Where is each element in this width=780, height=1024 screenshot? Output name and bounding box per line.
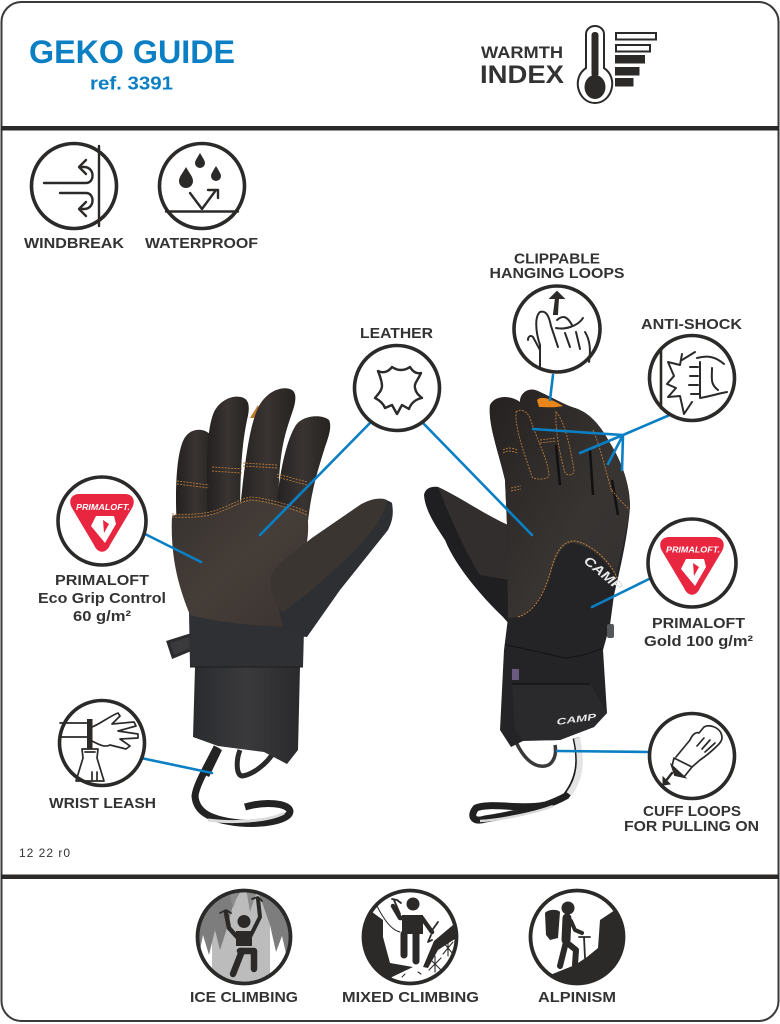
title: GEKO GUIDE xyxy=(29,34,235,70)
leader lines xyxy=(141,375,672,773)
label: primaloft eco grip control: Eco Grip Control xyxy=(38,590,166,607)
callout: clippable hanging loops xyxy=(490,252,625,372)
label: primaloft eco grip control xyxy=(38,572,166,625)
label: primaloft eco grip control: PRIMALOFT xyxy=(55,572,149,589)
palm xyxy=(172,499,308,627)
stitching xyxy=(172,463,307,517)
label: mixed climbing: MIXED CLIMBING xyxy=(342,989,479,1006)
label: primaloft gold xyxy=(644,615,753,650)
label: waterproof: WATERPROOF xyxy=(145,235,258,252)
callout: primaloft eco grip control xyxy=(38,477,166,625)
label: windbreak: WINDBREAK xyxy=(24,235,124,252)
icon: primaloft badge: PRIMALOFT. xyxy=(666,544,720,554)
icon: fist impact xyxy=(650,336,734,420)
thumb xyxy=(424,487,510,625)
icon: thermometer xyxy=(578,26,612,103)
thumb xyxy=(271,499,393,637)
title: ref. 3391 xyxy=(90,72,173,94)
title xyxy=(29,34,235,94)
hand shell xyxy=(490,390,630,747)
side buckle xyxy=(168,635,190,657)
icon: ice climber xyxy=(192,888,293,985)
warmth index: WARMTH xyxy=(481,44,563,62)
callout: wrist leash xyxy=(49,700,156,812)
leash xyxy=(473,738,580,821)
icon: primaloft badge: PRIMALOFT. xyxy=(76,502,130,512)
label: cuff loops xyxy=(624,803,759,835)
leash xyxy=(195,747,290,823)
callout: cuff loops xyxy=(624,714,759,835)
revision code: 12 22 r0 xyxy=(19,846,70,860)
activity: alpinism xyxy=(530,890,630,1006)
activity: ice climbing xyxy=(190,888,298,1006)
label: ice climbing: ICE CLIMBING xyxy=(190,989,298,1006)
label: primaloft gold: PRIMALOFT xyxy=(652,615,745,632)
icon: primaloft badge xyxy=(58,477,146,565)
logo: back of hand: CAMP xyxy=(581,553,626,594)
cuff details xyxy=(505,624,614,741)
icon: mixed climber xyxy=(355,890,458,986)
label: clippable: CLIPPABLE xyxy=(514,252,600,268)
logo: cuff: CAMP xyxy=(556,711,598,727)
callout: leather xyxy=(354,325,440,430)
finger slits and stitching xyxy=(503,410,630,617)
orange loop xyxy=(537,398,563,407)
callout: anti-shock xyxy=(641,316,742,420)
label: anti-shock: ANTI-SHOCK xyxy=(641,316,742,333)
label: cuff loops: FOR PULLING ON xyxy=(624,818,759,835)
warmth bars xyxy=(615,33,656,86)
warmth index: INDEX xyxy=(480,61,564,89)
label: leather: LEATHER xyxy=(360,325,433,342)
left glove xyxy=(168,388,393,823)
icon: glove with cuff loop xyxy=(650,714,734,798)
label: hanging loops: HANGING LOOPS xyxy=(490,266,625,282)
activity: mixed climbing xyxy=(342,890,479,1006)
icon: waterproof xyxy=(160,144,244,228)
right glove xyxy=(424,390,630,821)
icon: hide xyxy=(354,346,440,430)
callout: primaloft gold xyxy=(644,519,753,650)
label: cuff loops: CUFF LOOPS xyxy=(643,803,741,820)
label: alpinism: ALPINISM xyxy=(538,989,616,1006)
fingers xyxy=(176,388,330,530)
cuff xyxy=(189,612,304,764)
label: primaloft gold: Gold 100 g/m² xyxy=(644,633,753,650)
icon: alpinist xyxy=(530,890,630,990)
icon: windbreak xyxy=(32,144,116,228)
label: primaloft eco grip control: 60 g/m² xyxy=(73,608,131,625)
label: wrist leash: WRIST LEASH xyxy=(49,795,156,812)
leather upper xyxy=(490,390,630,618)
icon: wrist leash xyxy=(60,700,144,786)
icon: hand with loop xyxy=(514,286,600,372)
warmth index xyxy=(480,26,656,103)
